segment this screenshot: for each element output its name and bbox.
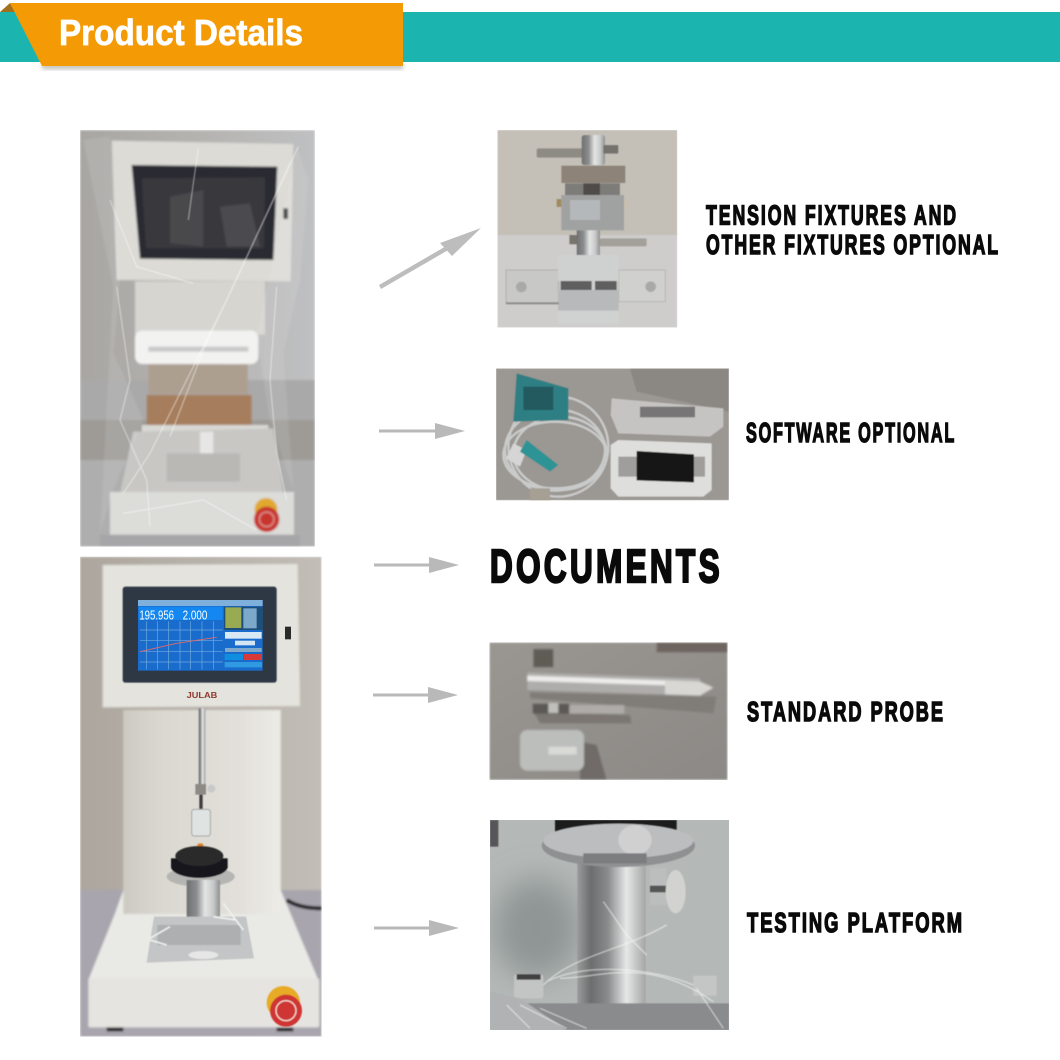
JULAB logo: JULAB xyxy=(187,691,218,700)
arrow 1 xyxy=(379,228,481,289)
heading: product details: Product Details xyxy=(59,12,303,53)
touch screen: 195.956 xyxy=(139,608,174,622)
arrow 5 xyxy=(374,920,459,936)
touch screen xyxy=(123,587,277,683)
label: standard probe: STANDARD PROBE xyxy=(747,696,945,727)
header band xyxy=(0,3,1060,69)
photo: machine wrapped in plastic xyxy=(80,130,315,547)
arrow 2 xyxy=(379,423,465,439)
arrow 4 xyxy=(373,687,458,703)
label: documents: DOCUMENTS xyxy=(490,540,723,592)
probe rod xyxy=(199,708,205,787)
touch screen: 2.000 xyxy=(183,608,207,622)
arrow 3 xyxy=(374,557,459,573)
heading: tension fixtures xyxy=(706,200,1000,260)
photo: assembled testing machine xyxy=(80,557,322,1037)
photo: tension fixture xyxy=(497,130,677,328)
photo: testing platform xyxy=(490,820,729,1030)
photo: standard probe xyxy=(489,642,728,780)
photo: usb cable and software drive xyxy=(496,368,729,502)
